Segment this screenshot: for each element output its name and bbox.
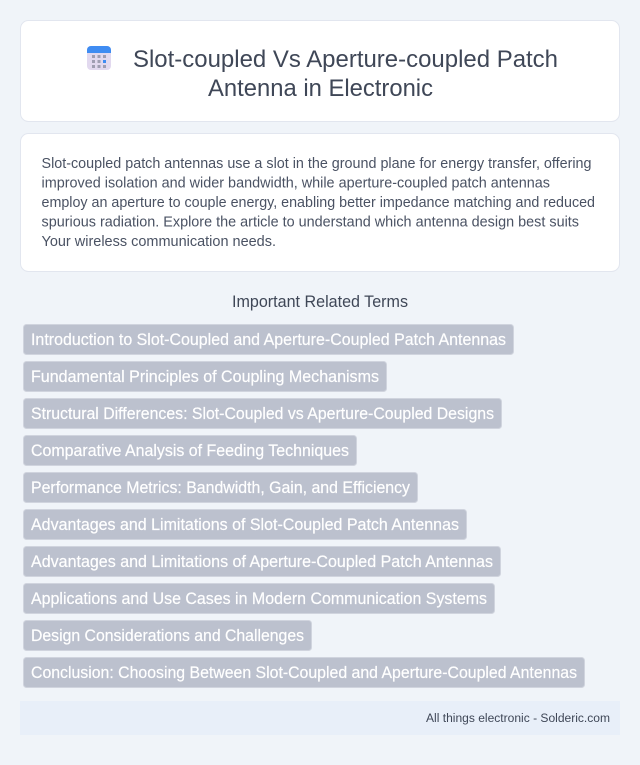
text block: summary paragraph: Slot-coupled patch antennas use a slot in the ground plane for energy transfer, offering — [42, 156, 592, 172]
tag 2: Fundamental Principles of Coupling Mechanisms — [31, 368, 379, 386]
tag 9 — [24, 620, 312, 650]
tag 8: Applications and Use Cases in Modern Communication Systems — [31, 590, 487, 608]
text block: summary paragraph — [42, 156, 595, 250]
title: Slot-coupled Vs Aperture-coupled Patch — [133, 46, 558, 73]
tag 5: Performance Metrics: Bandwidth, Gain, and Efficiency — [31, 479, 411, 497]
list: related term tags — [24, 324, 584, 688]
text block: summary paragraph: spurious radiation. Explore the article to understand which antenna design best suits — [42, 214, 579, 230]
tag 7: Advantages and Limitations of Aperture-Coupled Patch Antennas — [31, 553, 493, 571]
tag 2 — [24, 362, 386, 392]
tag 3: Structural Differences: Slot-Coupled vs Aperture-Coupled Designs — [31, 405, 494, 423]
title — [133, 46, 558, 102]
footer: All things electronic - Solderic.com — [426, 711, 610, 725]
tag 3 — [24, 398, 502, 428]
tag 7 — [24, 546, 500, 576]
text block: summary paragraph: Your wireless communication needs. — [42, 234, 276, 250]
tag 1: Introduction to Slot-Coupled and Aperture-Coupled Patch Antennas — [31, 331, 506, 349]
tag 9: Design Considerations and Challenges — [31, 627, 304, 645]
text block: summary paragraph: improved isolation and wider bandwidth, while aperture-coupled patch antennas — [42, 176, 550, 192]
tag 6: Advantages and Limitations of Slot-Coupled Patch Antennas — [31, 516, 459, 534]
tag 1 — [24, 324, 514, 354]
tag 6 — [24, 510, 466, 540]
tag 4: Comparative Analysis of Feeding Techniques — [31, 442, 349, 460]
text block: summary paragraph: employ an aperture to couple energy, enabling better impedance matching and reduced — [42, 195, 595, 211]
tag 10: Conclusion: Choosing Between Slot-Coupled and Aperture-Coupled Antennas — [31, 664, 577, 682]
footer — [20, 701, 620, 735]
tag 10 — [24, 658, 584, 688]
panel: title card — [20, 20, 620, 122]
tag 5 — [24, 472, 418, 502]
title: Antenna in Electronic — [208, 75, 433, 102]
tag 4 — [24, 436, 356, 466]
panel: summary — [20, 134, 620, 272]
icon: calendar — [87, 46, 111, 70]
tag 8 — [24, 584, 494, 614]
heading: important related terms: Important Related Terms — [232, 293, 408, 311]
